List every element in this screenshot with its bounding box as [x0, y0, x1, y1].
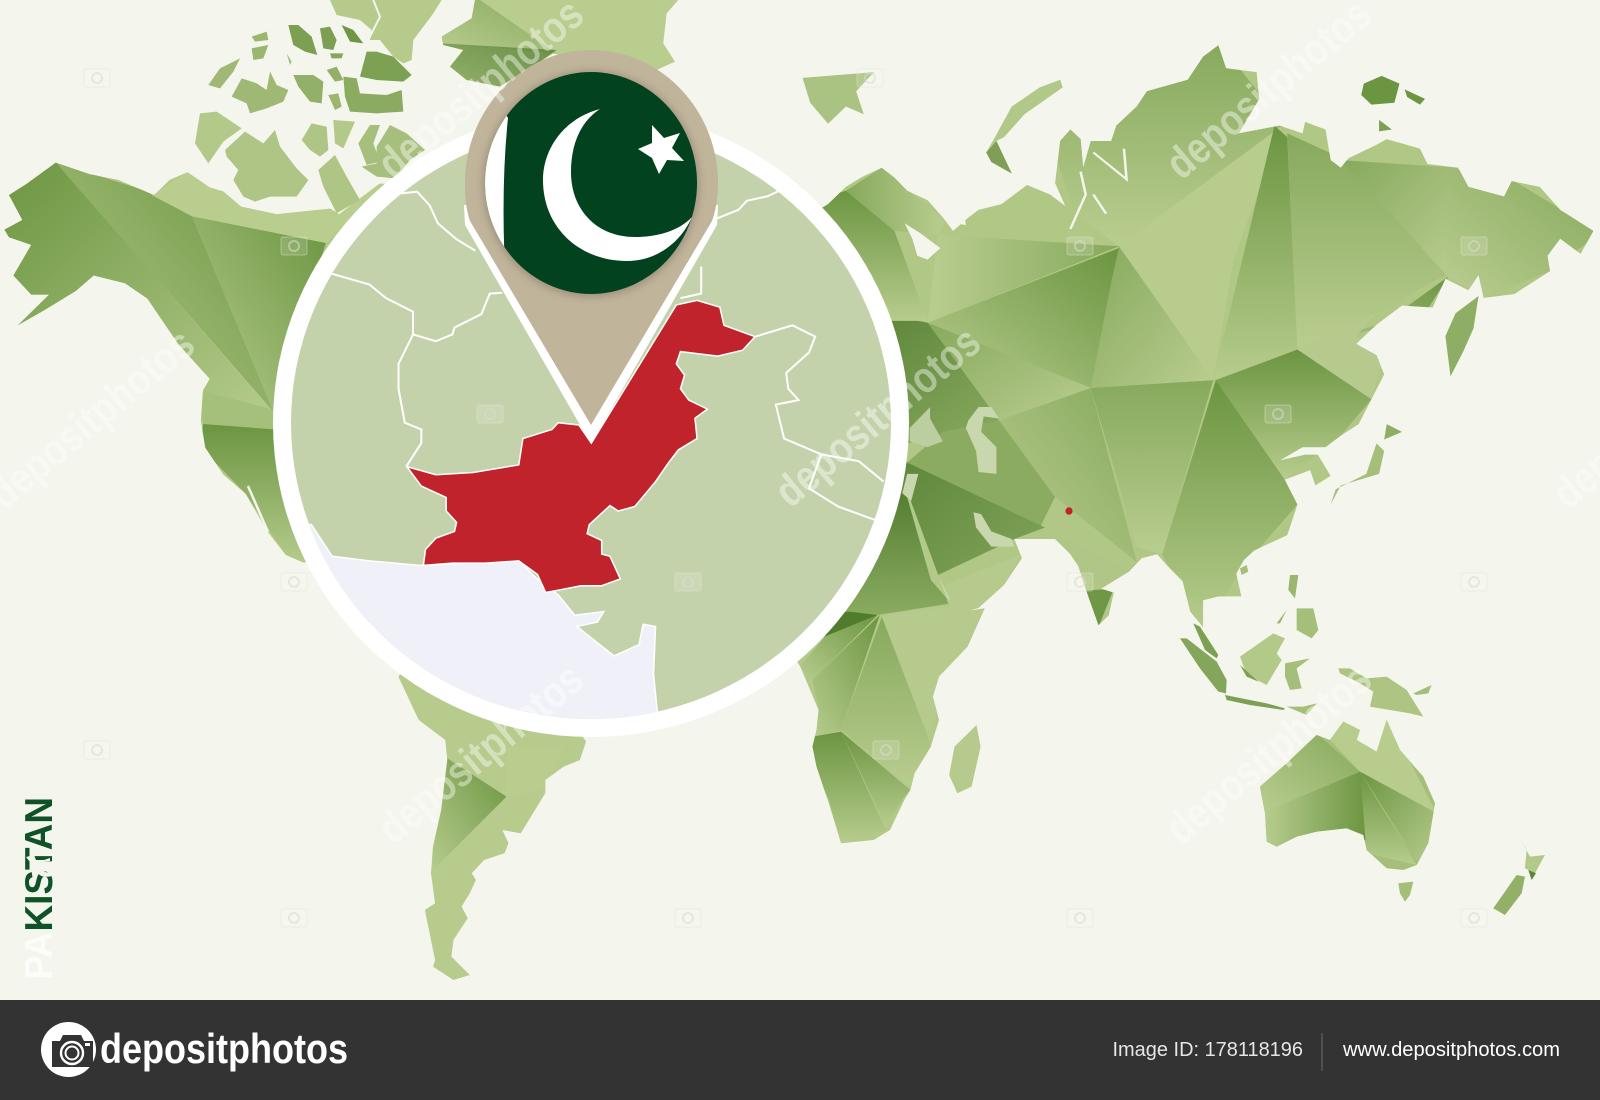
magnifier circle ring	[273, 109, 909, 737]
divider	[1322, 1033, 1323, 1071]
website url: www.depositphotos.com	[1342, 1039, 1560, 1061]
watermark camera icons	[84, 69, 1487, 927]
continent: Baja inlet	[248, 486, 268, 532]
image id: Image ID: 178118196	[1112, 1039, 1303, 1061]
country: Pakistan highlighted in red	[407, 300, 755, 593]
watermarks: depositphotos	[1156, 654, 1381, 854]
continent: Greenland	[440, 0, 680, 90]
Arctic and Pacific islands of Eurasia	[803, 72, 1479, 505]
panel: zoomed map of Pakistan and neighbours	[291, 153, 891, 719]
continent: North America	[4, 162, 386, 562]
continent: South America	[398, 674, 586, 980]
logo: camera badge	[41, 1022, 96, 1077]
watermarks	[0, 0, 1600, 854]
marker: red location dot	[1065, 507, 1073, 515]
title: PAKISTAN in flag colours: PAKISTAN	[18, 797, 61, 980]
sea: Arabian Sea	[309, 524, 658, 719]
flag star	[638, 125, 684, 174]
map pin with flag of Pakistan	[464, 50, 718, 444]
flag disc	[480, 70, 705, 300]
continent: Africa	[797, 493, 984, 844]
title crescent overlay	[34, 866, 52, 877]
pin white outline	[464, 205, 718, 444]
Southeast Asian and Oceanian islands	[1180, 565, 1545, 915]
continent: Eurasia	[800, 30, 1600, 630]
logo wordmark: depositphotos	[100, 1025, 348, 1072]
footer bar	[0, 1000, 1600, 1100]
Eurasia inland seas and gulfs	[899, 149, 1127, 600]
watermarks: depositphotos	[765, 317, 990, 517]
watermarks: depositphotos	[368, 654, 593, 854]
flag crescent	[543, 109, 692, 261]
pin body	[465, 50, 718, 425]
Canadian Arctic islands	[195, 0, 442, 213]
island: Madagascar	[949, 725, 981, 793]
continent: Australia	[1257, 717, 1440, 873]
flag shadow	[483, 71, 699, 297]
country borders	[330, 189, 884, 520]
title star overlay	[26, 855, 50, 862]
